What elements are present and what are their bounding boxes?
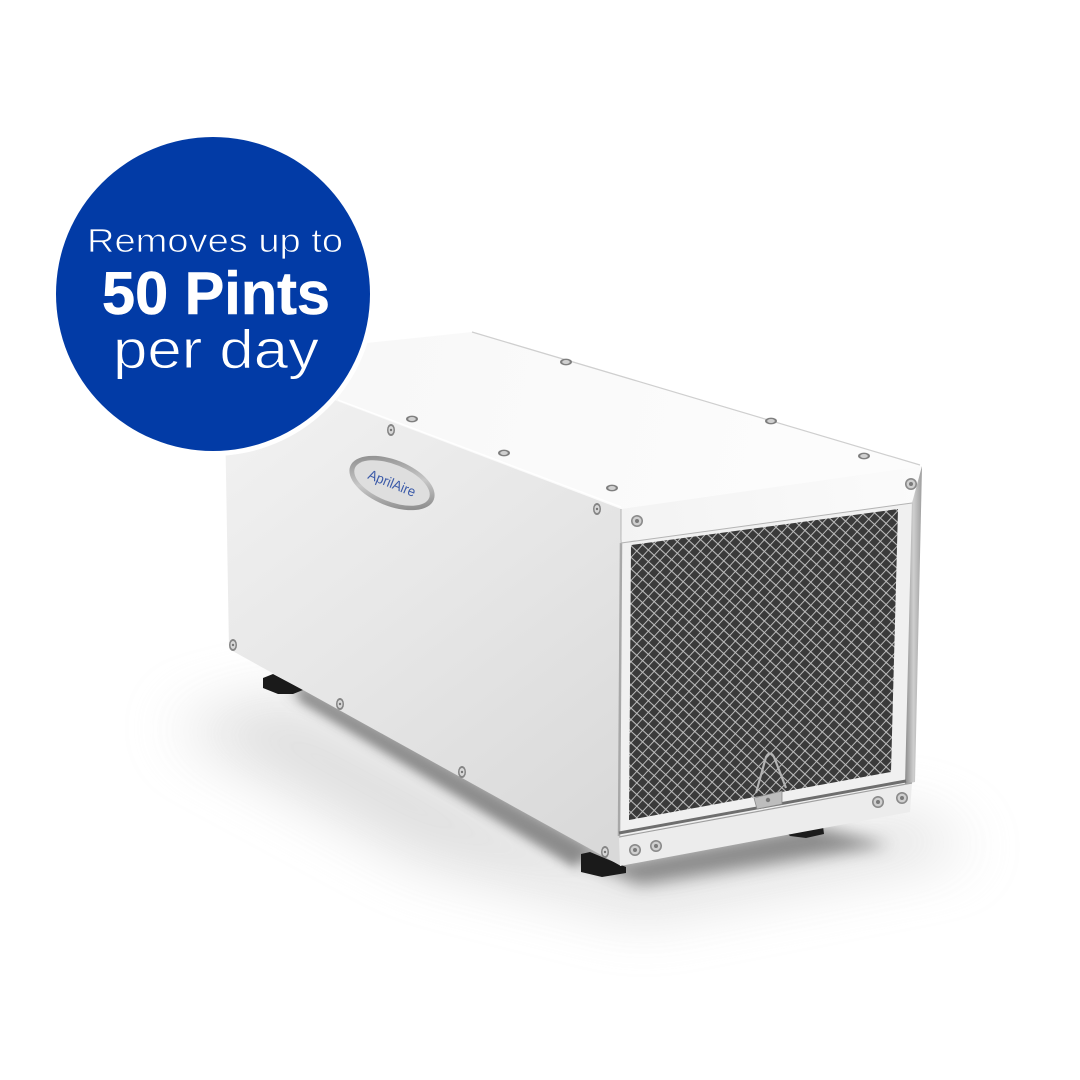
front top band edge <box>621 503 912 543</box>
front bottom band <box>619 783 912 866</box>
top edge highlight <box>338 400 621 507</box>
badge text: 50 Pints: 50 Pints <box>102 260 330 327</box>
top panel seam <box>472 332 920 465</box>
badge: blue circle with text <box>56 137 370 451</box>
front recess frame <box>619 500 912 838</box>
filter pull handle <box>754 754 786 809</box>
top panel <box>224 332 922 509</box>
foot: rear right <box>785 826 824 838</box>
logo badge <box>342 445 442 521</box>
right metal channel <box>905 466 922 784</box>
frame bottom dark edge <box>619 781 906 833</box>
floor shadow <box>170 680 975 915</box>
logo badge: AprilAire <box>366 466 418 500</box>
front top band <box>621 466 922 543</box>
bottom band shadow line <box>619 783 912 837</box>
badge text: removes up to: Removes up to <box>87 223 343 260</box>
foot: rear left <box>263 674 303 694</box>
screws <box>229 359 917 858</box>
frame left metal edge <box>619 543 621 836</box>
dehumidifier product <box>224 332 922 877</box>
badge: white ring <box>51 132 375 456</box>
foot: front <box>581 852 626 877</box>
side panel <box>224 358 621 866</box>
badge text: per day: per day <box>113 318 320 380</box>
mesh filter grille <box>629 509 898 820</box>
